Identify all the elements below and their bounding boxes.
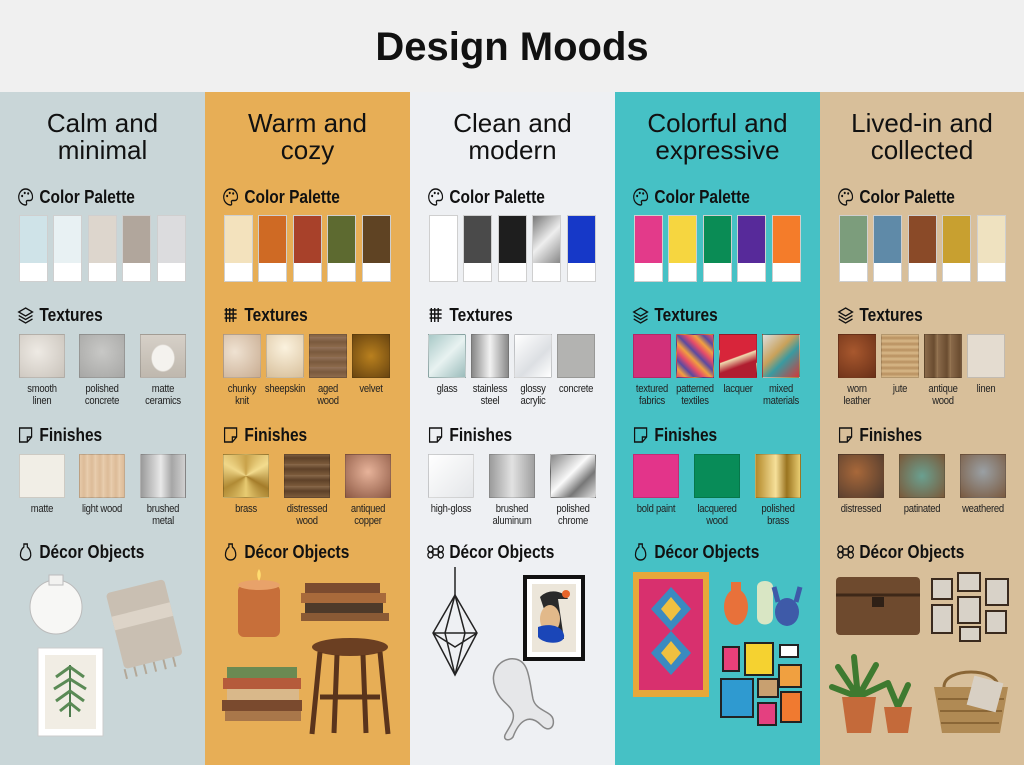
finish tiles: lacquered — [697, 503, 737, 515]
finish tiles: wood — [296, 515, 318, 527]
finish tiles — [820, 454, 1024, 526]
texture tiles: patterned — [676, 383, 714, 395]
finish tiles: chrome — [558, 515, 588, 527]
heading: colorful and expressive — [647, 108, 788, 165]
icon: woven basket — [934, 672, 1008, 733]
texture tiles: acrylic — [520, 395, 545, 407]
texture tiles: aged — [318, 383, 338, 395]
texture tiles: antique — [928, 383, 958, 395]
panel: warm and cozy — [205, 92, 410, 765]
heading: colorful and expressive: expressive — [655, 135, 780, 165]
finish tiles: copper — [354, 515, 382, 527]
icon: ceramic vases — [724, 581, 800, 626]
texture tiles: chunky — [228, 383, 256, 395]
swatches — [429, 215, 596, 282]
finish tiles: high-gloss — [431, 503, 471, 515]
icon: candle — [238, 569, 280, 637]
texture tiles: stainless — [473, 383, 507, 395]
texture tiles: worn — [847, 383, 867, 395]
swatches — [839, 215, 1006, 282]
finish tiles — [428, 454, 596, 527]
swatches — [19, 215, 186, 282]
texture tiles: concrete — [559, 383, 593, 395]
icon: photo frames — [932, 573, 1008, 641]
icon: framed abstract art — [523, 575, 585, 661]
finish tiles: brushed — [496, 503, 528, 515]
section: finishes: Finishes — [244, 425, 307, 445]
texture tiles: mixed — [769, 383, 793, 395]
panel: lived-in and collected — [820, 92, 1024, 765]
icon: wooden chest — [836, 577, 920, 635]
texture tiles: glass — [437, 383, 457, 395]
heading: calm and minimal — [47, 108, 158, 165]
heading: lived-in and collected: collected — [871, 135, 973, 165]
texture tiles: ceramics — [145, 395, 181, 407]
heading: clean and modern — [453, 108, 572, 165]
finish tiles: polished — [761, 503, 795, 515]
icon: framed leaf print — [38, 648, 103, 736]
heading: colorful and expressive: Colorful and — [647, 108, 788, 138]
finish tiles: distressed — [841, 503, 881, 515]
texture tiles — [428, 334, 595, 407]
finish tiles: matte — [31, 503, 53, 515]
finish tiles — [223, 454, 391, 527]
texture tiles — [633, 334, 800, 407]
title — [0, 0, 1024, 92]
texture tiles: concrete — [85, 395, 119, 407]
icon: vase — [30, 575, 82, 634]
heading: warm and cozy: Warm and — [248, 108, 367, 138]
section: color palette: Color Palette — [449, 187, 545, 207]
section: textures: Textures — [244, 305, 308, 325]
heading: lived-in and collected: Lived-in and — [851, 108, 993, 138]
finish tiles: patinated — [904, 503, 940, 515]
finish tiles — [633, 454, 801, 527]
panel: calm and minimal — [0, 92, 205, 765]
texture tiles: smooth — [27, 383, 57, 395]
texture tiles: velvet — [359, 383, 383, 395]
icon: book stack bottom — [222, 667, 302, 721]
section: finishes: Finishes — [654, 425, 717, 445]
icon: potted plants — [832, 657, 912, 733]
texture tiles: linen — [33, 395, 51, 407]
finish tiles: aluminum — [493, 515, 531, 527]
finish tiles — [19, 454, 186, 527]
section: textures: Textures — [39, 305, 103, 325]
texture tiles: polished — [85, 383, 119, 395]
finish tiles: brass — [767, 515, 789, 527]
finish tiles: brass — [235, 503, 257, 515]
swatches — [224, 215, 391, 282]
heading: calm and minimal: Calm and — [47, 108, 158, 138]
texture tiles — [19, 334, 186, 407]
finish tiles: metal — [152, 515, 174, 527]
section: finishes: Finishes — [39, 425, 102, 445]
section: color palette: Color Palette — [39, 187, 135, 207]
section: decor objects: Décor Objects — [244, 542, 349, 562]
section: finishes — [837, 424, 922, 446]
heading: lived-in and collected — [851, 108, 993, 165]
heading: warm and cozy: cozy — [281, 135, 334, 165]
title: Design Moods — [375, 25, 649, 69]
decor illustrations — [633, 572, 802, 726]
finish tiles: bold paint — [637, 503, 675, 515]
section: color palette: Color Palette — [654, 187, 750, 207]
icon: geometric pendant — [433, 567, 477, 675]
finish tiles: polished — [556, 503, 590, 515]
panel: colorful and expressive — [615, 92, 820, 765]
finish tiles: brushed — [147, 503, 179, 515]
panel: clean and modern — [410, 92, 615, 765]
section: decor objects: Décor Objects — [449, 542, 554, 562]
section: decor objects: Décor Objects — [654, 542, 759, 562]
texture tiles: matte — [152, 383, 174, 395]
texture tiles: knit — [235, 395, 249, 407]
icon: book stack top — [301, 583, 389, 621]
texture tiles: steel — [481, 395, 499, 407]
decor illustrations — [432, 567, 585, 740]
swatches — [634, 215, 801, 282]
heading: calm and minimal: minimal — [58, 135, 147, 165]
texture tiles: sheepskin — [265, 383, 305, 395]
icon: gallery wall frames — [721, 643, 801, 725]
icon: stool — [312, 638, 388, 734]
texture tiles: materials — [763, 395, 799, 407]
heading: clean and modern: Clean and — [453, 108, 572, 138]
texture tiles: textiles — [681, 395, 709, 407]
heading: clean and modern: modern — [468, 135, 557, 165]
section: decor objects: Décor Objects — [39, 542, 144, 562]
decor illustrations — [222, 569, 390, 734]
decor illustrations — [820, 567, 1024, 757]
decor illustrations — [30, 574, 182, 736]
icon: panton chair — [493, 659, 553, 740]
section: textures: Textures — [654, 305, 718, 325]
finish tiles: weathered — [962, 503, 1004, 515]
texture tiles: jute — [893, 383, 907, 395]
section: decor objects: Décor Objects — [859, 542, 964, 562]
finish tiles: light wood — [82, 503, 122, 515]
texture tiles: textured — [636, 383, 668, 395]
texture tiles: glossy — [520, 383, 546, 395]
finish tiles: distressed — [287, 503, 327, 515]
section: color palette: Color Palette — [859, 187, 955, 207]
section: finishes: Finishes — [449, 425, 512, 445]
texture tiles: fabrics — [639, 395, 665, 407]
texture tiles: leather — [843, 395, 871, 407]
texture tiles: wood — [932, 395, 954, 407]
section: finishes: Finishes — [859, 425, 922, 445]
section: color palette: Color Palette — [244, 187, 340, 207]
icon: throw blanket — [106, 579, 185, 679]
texture tiles — [223, 334, 390, 407]
texture tiles: wood — [317, 395, 339, 407]
finish tiles: wood — [706, 515, 728, 527]
section: textures: Textures — [859, 305, 923, 325]
heading: warm and cozy — [248, 108, 367, 165]
icon: patterned rug — [633, 572, 709, 697]
texture tiles: linen — [977, 383, 995, 395]
section: textures: Textures — [449, 305, 513, 325]
texture tiles: lacquer — [723, 383, 753, 395]
finish tiles: antiqued — [351, 503, 385, 515]
texture tiles — [820, 334, 1024, 406]
